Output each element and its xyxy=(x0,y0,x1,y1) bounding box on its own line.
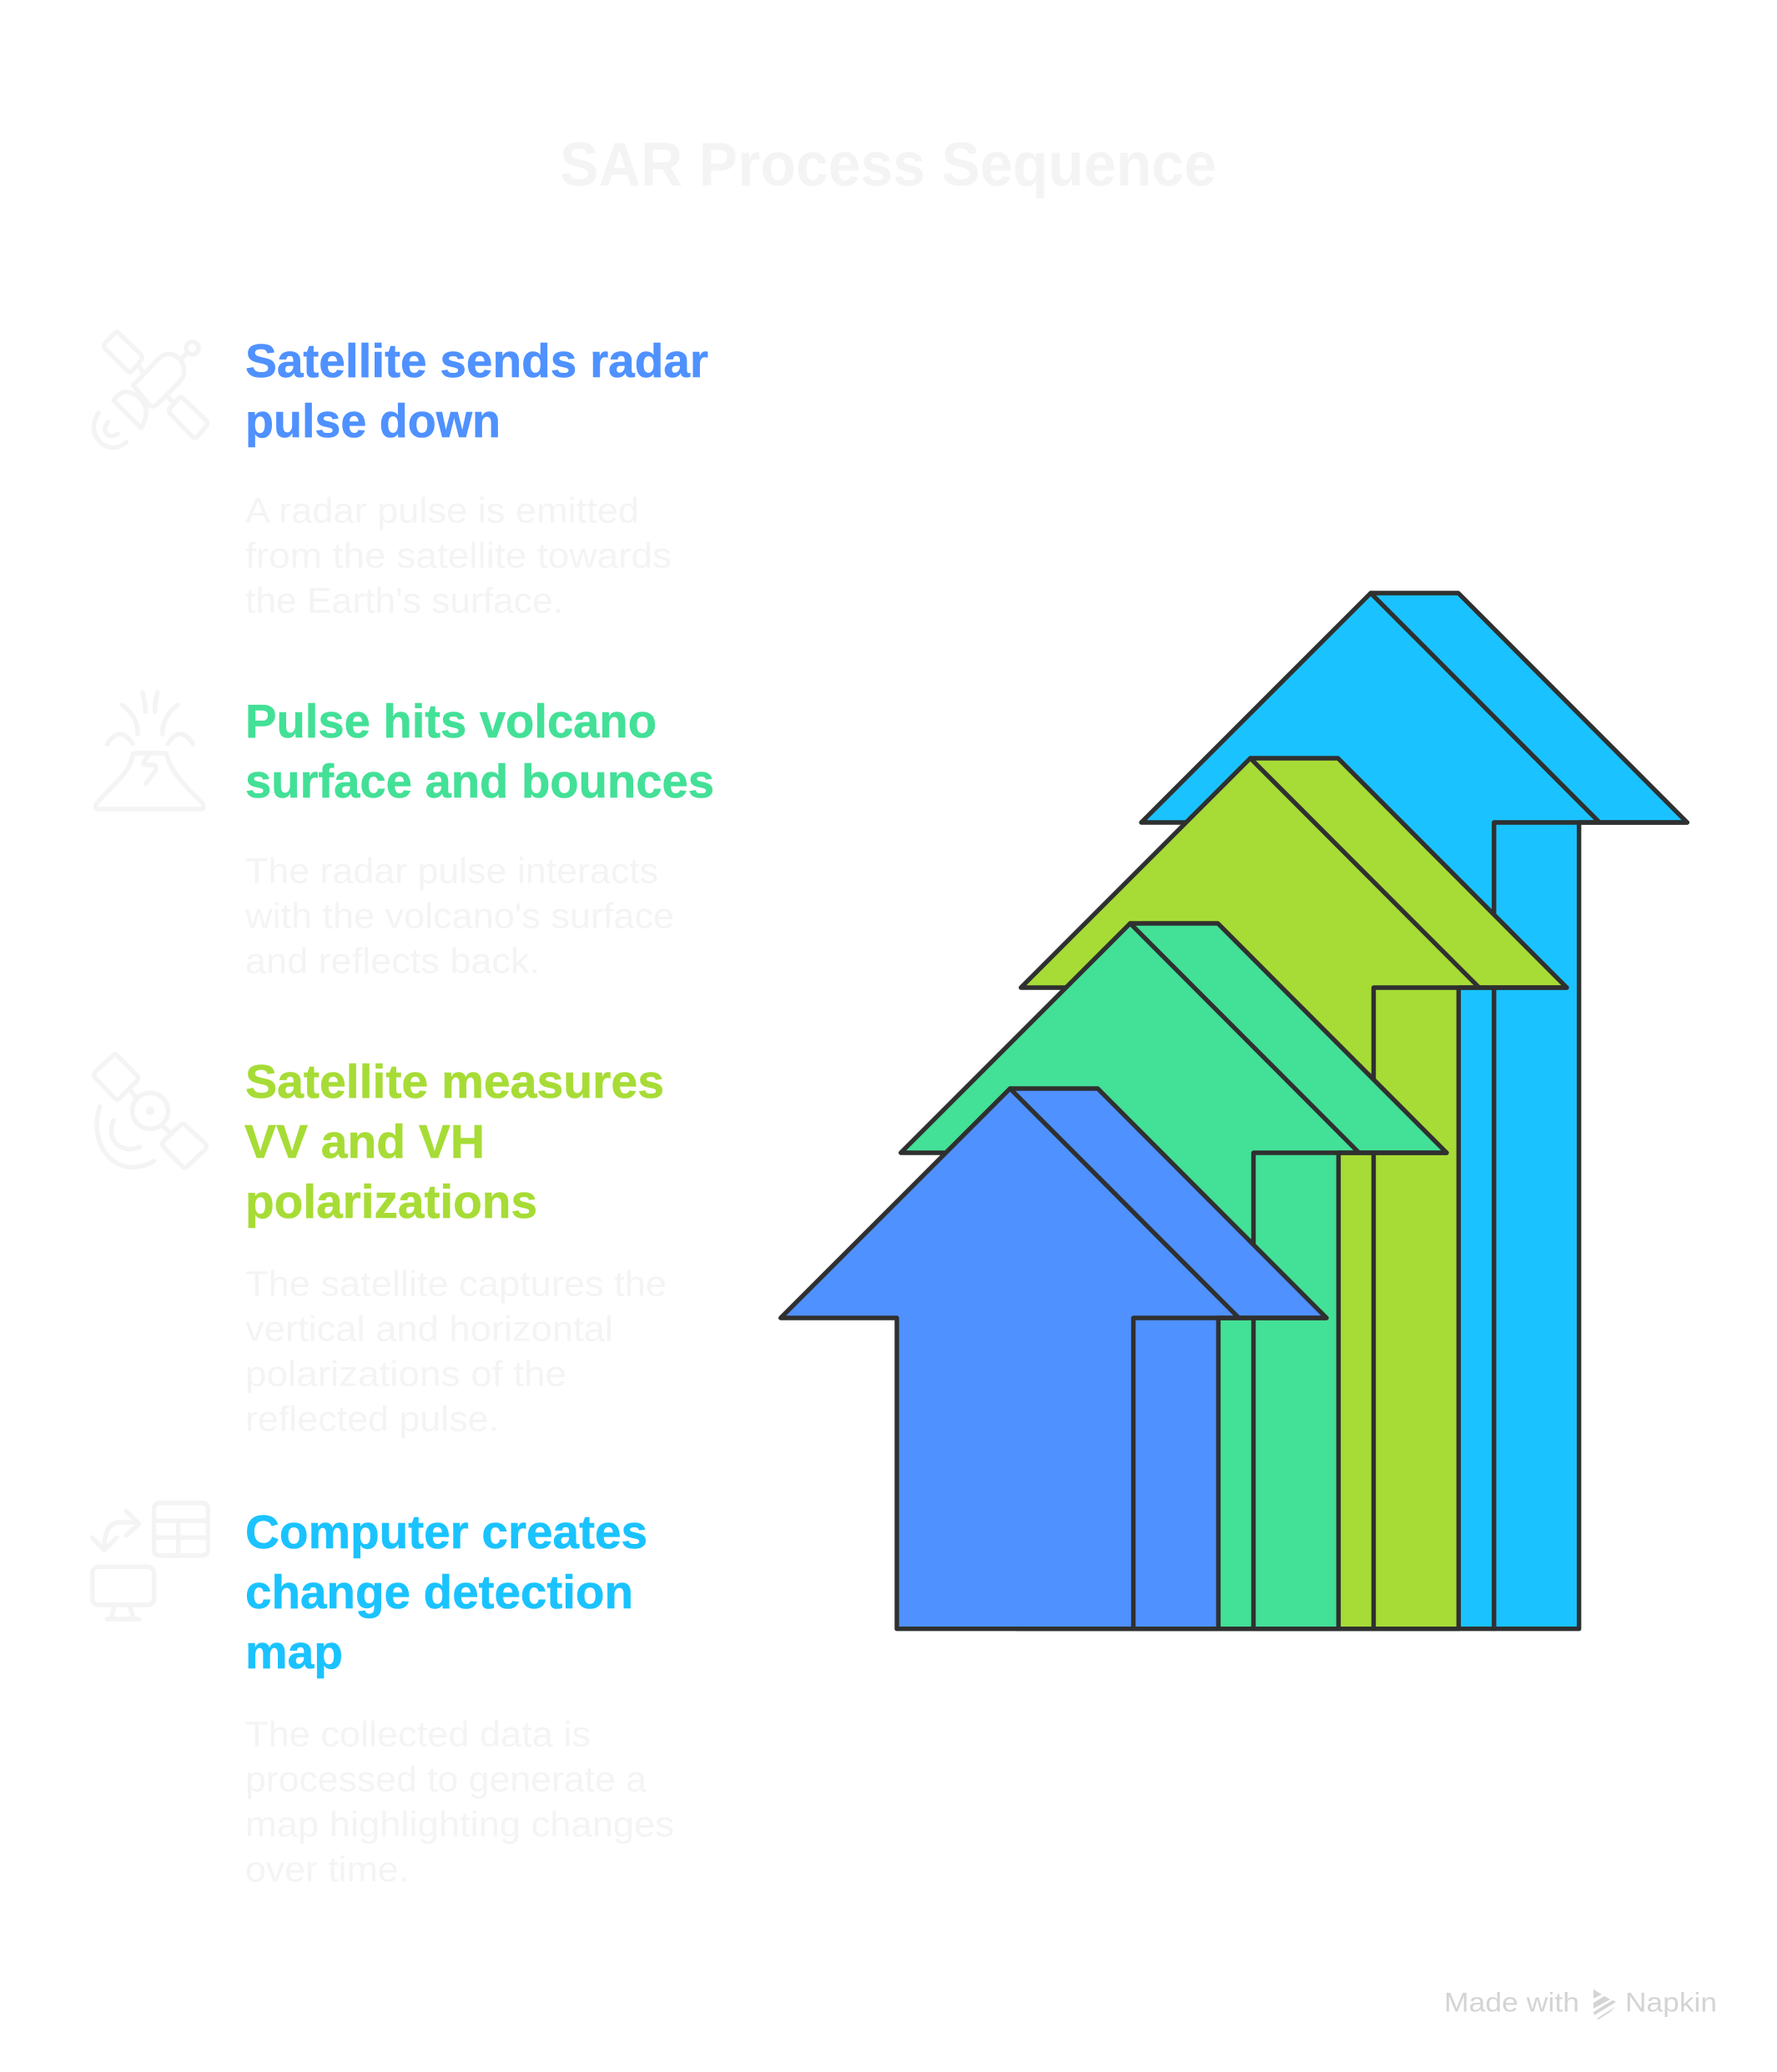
arrow: lime, step 3 xyxy=(1021,758,1567,1629)
icon: computer, table and arrows xyxy=(93,1503,208,1619)
heading: step 3: polarizations xyxy=(245,1175,537,1229)
icon: satellite with waves xyxy=(94,1054,206,1168)
body text: step 4: processed to generate a xyxy=(245,1759,647,1799)
body text: step 4: The collected data is xyxy=(245,1714,591,1754)
step 4: computer creates map xyxy=(93,1503,674,1889)
body text: step 3: polarizations of the xyxy=(245,1354,566,1394)
body text: step 4: over time. xyxy=(245,1849,409,1889)
footer: made with Napkin: Napkin xyxy=(1625,1988,1717,2018)
body text: step 4: map highlighting changes xyxy=(245,1804,674,1844)
step 1: satellite sends radar pulse xyxy=(93,332,708,621)
body text: step 3: The satellite captures the xyxy=(245,1264,667,1304)
arrow: blue, step 1 xyxy=(781,1089,1326,1629)
arrow: cyan, step 4 xyxy=(1141,593,1687,1629)
body text: step 2: with the volcano's surface xyxy=(244,897,674,937)
step 3: satellite measures polarizations xyxy=(94,1054,667,1439)
icon: Napkin logo xyxy=(1593,1989,1616,2019)
body text: step 3: reflected pulse. xyxy=(245,1399,499,1439)
body text: step 2: The radar pulse interacts xyxy=(245,852,658,892)
body text: step 1: the Earth's surface. xyxy=(245,581,563,621)
body text: step 1: A radar pulse is emitted xyxy=(245,491,639,531)
heading: step 2: surface and bounces xyxy=(245,755,714,808)
footer: made with Napkin: Made with xyxy=(1444,1988,1579,2018)
body text: step 1: from the satellite towards xyxy=(245,536,672,576)
step 2: pulse hits volcano xyxy=(96,692,714,982)
icon: volcano xyxy=(96,692,204,809)
chart: four stepped arrows xyxy=(781,593,1687,1629)
heading: step 2: Pulse hits volcano xyxy=(245,695,657,748)
title: SAR Process Sequence xyxy=(560,130,1216,199)
heading: step 1: Satellite sends radar xyxy=(245,334,708,388)
heading: step 4: change detection xyxy=(245,1566,633,1619)
heading: step 3: Satellite measures xyxy=(245,1055,664,1109)
body text: step 3: vertical and horizontal xyxy=(245,1309,613,1349)
heading: step 4: map xyxy=(245,1626,343,1679)
heading: step 4: Computer creates xyxy=(245,1506,647,1559)
arrow: green, step 2 xyxy=(901,923,1447,1629)
heading: step 3: VV and VH xyxy=(244,1115,485,1169)
body text: step 2: and reflects back. xyxy=(245,942,540,982)
footer: made with Napkin xyxy=(1444,1988,1717,2019)
heading: step 1: pulse down xyxy=(245,395,501,448)
icon: satellite xyxy=(93,332,207,448)
